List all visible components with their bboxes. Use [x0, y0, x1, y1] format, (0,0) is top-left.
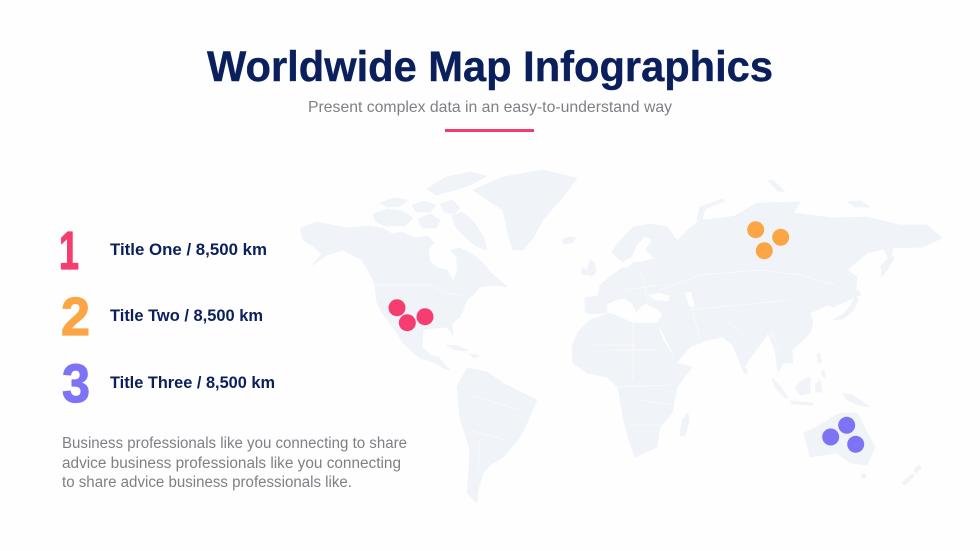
map: Black and Caspian seas	[648, 292, 695, 307]
description text: to share advice business professionals like.	[62, 474, 352, 491]
list item 2	[61, 287, 263, 347]
label 1: Title One / 8,500 km	[110, 241, 267, 259]
map: Scandinavia	[612, 224, 680, 262]
description text	[62, 435, 407, 491]
markers: purple cluster	[822, 417, 864, 453]
markers: red cluster	[388, 299, 434, 331]
map: Svalbard and Arctic islands	[768, 180, 870, 207]
number 2: 2	[61, 287, 90, 347]
map: Cuba and Caribbean	[446, 345, 480, 358]
map: Australia	[804, 413, 875, 465]
map: seas and borders	[375, 270, 835, 470]
title underline accent	[445, 129, 534, 132]
map: Madagascar	[680, 413, 689, 436]
number 3: 3	[62, 354, 90, 414]
description text: Business professionals like you connecting to share	[62, 435, 407, 452]
map: Iceland	[562, 237, 576, 244]
map: South America	[457, 368, 537, 503]
map: Sri Lanka	[744, 368, 747, 374]
title: Worldwide Map Infographics	[207, 43, 773, 91]
map: North America	[300, 222, 507, 370]
description text: advice business professionals like you connecting	[62, 455, 401, 472]
map: Novaya Zemlya	[697, 199, 724, 220]
label 3: Title Three / 8,500 km	[110, 374, 275, 392]
list item 3	[62, 354, 275, 414]
label 2: Title Two / 8,500 km	[110, 307, 263, 325]
map: Sakhalin	[881, 256, 894, 277]
map: Greenland	[473, 170, 577, 250]
markers: orange cluster	[747, 221, 789, 259]
map: Southeast Asian islands	[772, 353, 825, 405]
map: New Guinea	[843, 393, 870, 407]
map: Britain and Ireland	[581, 260, 596, 276]
map: Africa	[572, 313, 692, 457]
map: Japan	[833, 290, 861, 320]
world map	[300, 170, 942, 503]
map: Canadian Arctic islands	[373, 172, 487, 250]
map: Eurasia	[585, 202, 942, 372]
map: New Zealand	[902, 465, 921, 485]
number 1: 1	[59, 221, 79, 281]
map: Tasmania	[861, 474, 866, 478]
subtitle: Present complex data in an easy-to-understand way	[308, 99, 672, 116]
list item 1	[59, 221, 267, 281]
